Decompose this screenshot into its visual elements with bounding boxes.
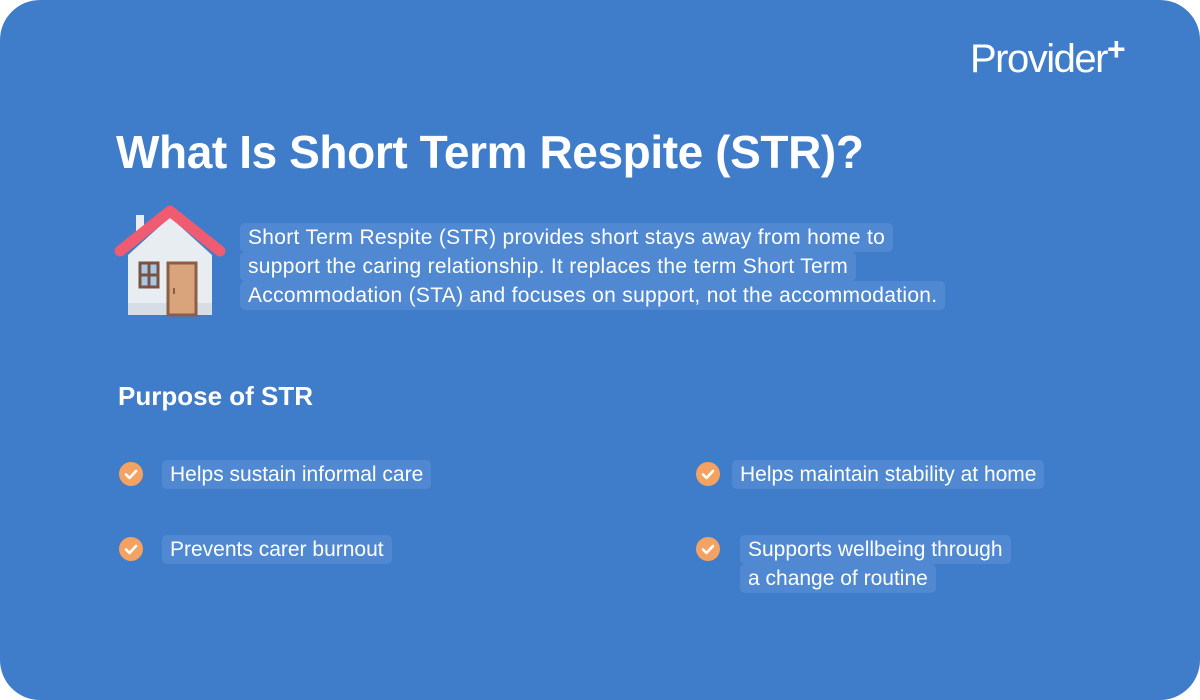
logo: Provider+ bbox=[970, 31, 1124, 81]
bullet: sustain informal care bbox=[119, 460, 431, 489]
bullet: carer burnout bbox=[119, 535, 392, 564]
title: What Is Short Term Respite (STR)? bbox=[116, 126, 864, 178]
bullet: stability at home: Helps maintain stability at home bbox=[740, 463, 1036, 486]
bullet: carer burnout: Prevents carer burnout bbox=[170, 538, 384, 561]
bullet: wellbeing: Supports wellbeing through bbox=[748, 538, 1003, 561]
subheading: Purpose of STR bbox=[118, 381, 313, 411]
intro text: support the caring relationship. It replaces the term Short Term bbox=[248, 255, 848, 278]
intro text: Accommodation (STA) and focuses on support, not the accommodation. bbox=[248, 284, 937, 307]
intro text bbox=[240, 223, 945, 310]
bullet: sustain informal care: Helps sustain informal care bbox=[170, 463, 423, 486]
icon: house bbox=[114, 206, 226, 316]
bullet: stability at home bbox=[696, 460, 1044, 489]
bullet: wellbeing: a change of routine bbox=[748, 567, 928, 590]
bullet: wellbeing bbox=[696, 535, 1011, 593]
intro text: Short Term Respite (STR) provides short stays away from home to bbox=[248, 226, 885, 249]
